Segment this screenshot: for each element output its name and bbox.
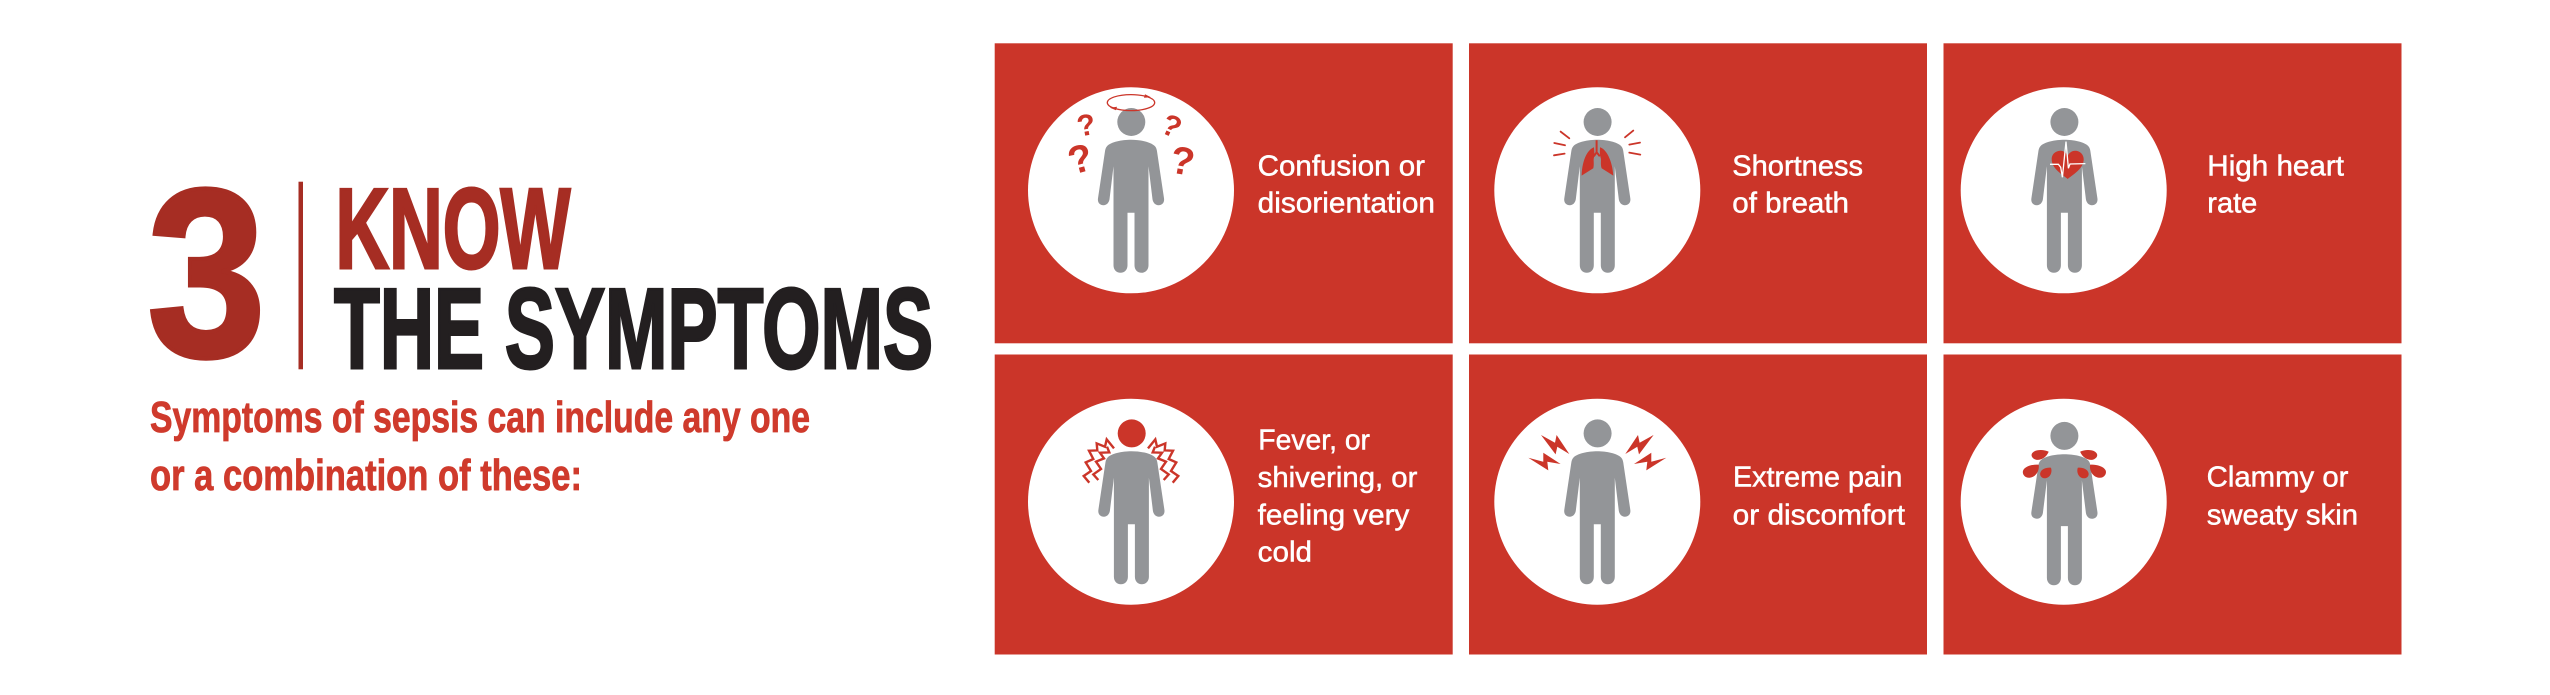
label: Confusion or [1258, 150, 1425, 182]
label: rate [2207, 187, 2257, 219]
panel: clammy skin [1944, 354, 2402, 654]
icon: person with heart [1961, 87, 2167, 293]
heading block [147, 139, 933, 500]
panel: fever [995, 354, 1453, 654]
icon: person with question marks: ? [1063, 136, 1097, 184]
label: cold [1258, 537, 1312, 569]
heading: THE SYMPTOMS: THE SYMPTOMS [334, 266, 933, 393]
panel background [1469, 43, 1927, 343]
intro text: Symptoms of sepsis can include any one [150, 393, 810, 442]
icon: person with lightning bolts [1494, 399, 1700, 605]
label [2207, 462, 2358, 531]
number 3: 3 [147, 139, 266, 407]
panel background [995, 354, 1453, 654]
label: Fever, or [1258, 425, 1370, 457]
panel background [1944, 43, 2402, 343]
icon: person with question marks: ? [1156, 108, 1187, 145]
label: or discomfort [1733, 499, 1905, 531]
label [2207, 150, 2344, 219]
icon: person with question marks: ? [1167, 139, 1198, 185]
icon: person with question marks [1028, 87, 1234, 293]
icon: person with sweat drops [1961, 399, 2167, 605]
panel: extreme pain [1469, 354, 1927, 654]
label: feeling very [1258, 499, 1410, 531]
label: disorientation [1258, 187, 1435, 219]
icon: person with lungs [1494, 87, 1700, 293]
label: High heart [2207, 150, 2344, 182]
icon: person shivering with red head [1028, 399, 1234, 605]
panel background [1469, 354, 1927, 654]
label: sweaty skin [2207, 499, 2358, 531]
label: Clammy or [2207, 462, 2349, 494]
intro text: or a combination of these: [150, 451, 582, 500]
label [1732, 150, 1863, 219]
panel: high heart rate [1944, 43, 2402, 343]
panel: shortness of breath [1469, 43, 1927, 343]
label [1258, 150, 1435, 219]
panel background [1944, 354, 2402, 654]
label [1733, 462, 1905, 531]
panel background [995, 43, 1453, 343]
label: shivering, or [1258, 462, 1418, 494]
label: Shortness [1732, 150, 1863, 182]
vertical divider [298, 182, 303, 369]
label: Extreme pain [1733, 462, 1902, 494]
label [1258, 425, 1418, 569]
heading: KNOW: KNOW [336, 166, 571, 293]
intro text [150, 393, 810, 500]
panel: confusion [995, 43, 1453, 343]
label: of breath [1732, 187, 1849, 219]
icon: person with question marks: ? [1074, 108, 1098, 144]
